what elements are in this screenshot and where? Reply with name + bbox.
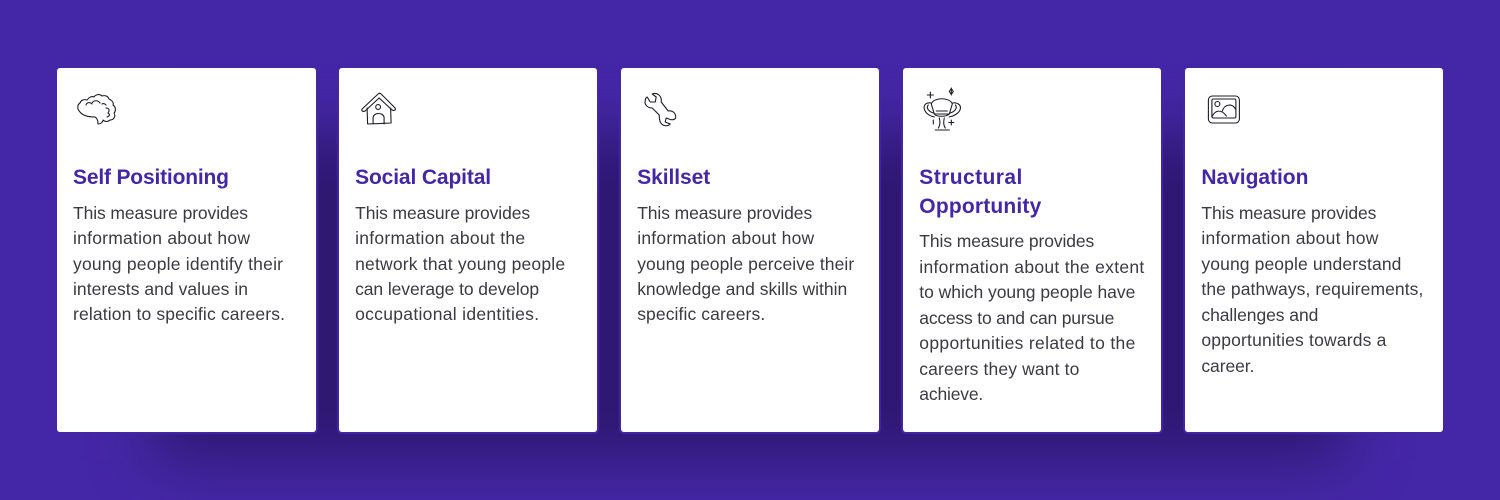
body text: young people understand <box>1201 254 1401 274</box>
body text: information about the <box>355 228 525 248</box>
heading: Skillset <box>637 166 710 189</box>
body text <box>1201 203 1423 376</box>
body text: This measure provides <box>1201 203 1376 223</box>
body text: This measure provides <box>355 203 530 223</box>
heading: Navigation <box>1201 166 1308 189</box>
body text: access to and can pursue <box>919 308 1114 328</box>
heading <box>919 166 1041 218</box>
body text: information about how <box>637 228 814 248</box>
body text: relation to specific careers. <box>73 304 285 324</box>
body text: careers they want to <box>919 359 1079 379</box>
body text: career. <box>1201 356 1254 376</box>
body text: opportunities towards a <box>1201 330 1386 350</box>
body text: the pathways, requirements, <box>1201 279 1423 299</box>
heading: Self Positioning <box>73 166 229 189</box>
panel: navigation <box>1185 68 1443 432</box>
body text <box>355 203 565 324</box>
body text <box>637 203 854 324</box>
icon: brain <box>78 95 115 124</box>
body text: This measure provides <box>919 231 1094 251</box>
icon: house <box>362 93 395 124</box>
panel: skillset <box>621 68 879 432</box>
body text: young people perceive their <box>637 254 854 274</box>
panel: social capital <box>339 68 597 432</box>
body text <box>919 231 1144 404</box>
body text: can leverage to develop <box>355 279 539 299</box>
heading: Structural <box>919 166 1022 189</box>
body text: knowledge and skills within <box>637 279 847 299</box>
panel: self positioning <box>57 68 316 432</box>
body text: opportunities related to the <box>919 333 1135 353</box>
heading: Opportunity <box>919 195 1041 218</box>
heading: Social Capital <box>355 166 491 189</box>
body text: interests and values in <box>73 279 248 299</box>
body text: achieve. <box>919 384 983 404</box>
body text: network that young people <box>355 254 565 274</box>
panel: structural opportunity <box>903 68 1161 432</box>
icon: wrench <box>645 93 676 126</box>
body text: to which young people have <box>919 282 1135 302</box>
body text: This measure provides <box>637 203 812 223</box>
body text: occupational identities. <box>355 304 539 324</box>
body text: challenges and <box>1201 305 1318 325</box>
icon: trophy <box>924 88 960 130</box>
body text: specific careers. <box>637 304 765 324</box>
icon: picture <box>1208 96 1239 123</box>
body text: information about how <box>1201 228 1378 248</box>
body text <box>73 203 285 324</box>
body text: information about the extent <box>919 257 1144 277</box>
body text: This measure provides <box>73 203 248 223</box>
body text: young people identify their <box>73 254 283 274</box>
body text: information about how <box>73 228 250 248</box>
